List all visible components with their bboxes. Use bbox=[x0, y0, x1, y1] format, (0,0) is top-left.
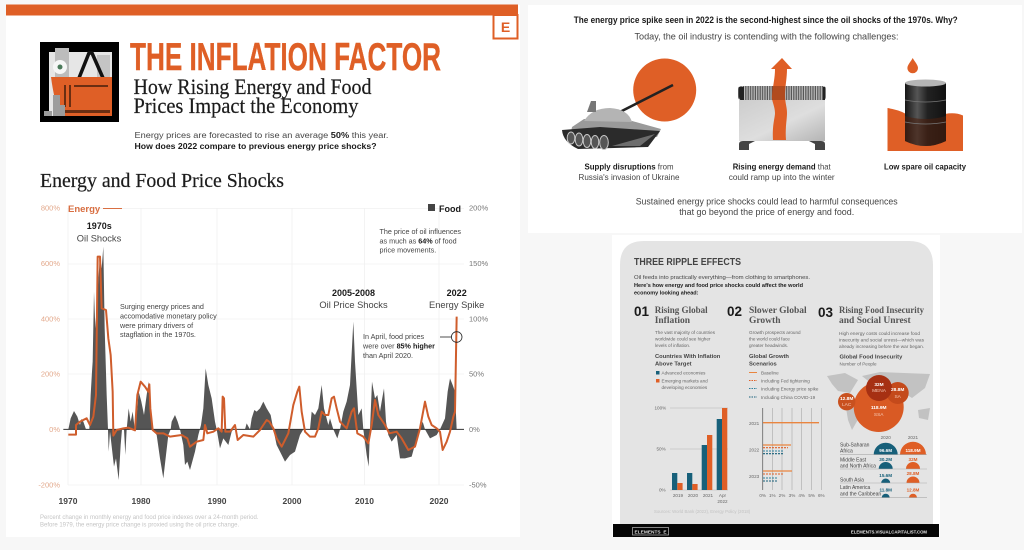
intro text: How does 2022 compare to previous energy price shocks? bbox=[134, 141, 376, 151]
annotation: stagflation: accomodative monetary policy bbox=[120, 312, 217, 320]
caption: rising energy demand: Rising energy demand that bbox=[733, 162, 831, 172]
left axis labels bbox=[38, 204, 60, 490]
icon: oil barrel and drop bbox=[888, 58, 963, 151]
table: food insecurity 2020 vs 2021: 2021 bbox=[908, 435, 919, 440]
table: food insecurity 2020 vs 2021: Sub-Saharan bbox=[840, 442, 870, 448]
section 01 text: worldwide could see higher bbox=[655, 336, 711, 342]
top accent bar bbox=[6, 4, 518, 16]
closing text: Sustained energy price shocks could lead to harmful consequences bbox=[636, 196, 898, 206]
intro: Oil feeds into practically everything—from clothing to smartphones. bbox=[634, 275, 811, 281]
right axis labels: 100% bbox=[469, 314, 489, 324]
logo: Elements E bbox=[494, 15, 518, 38]
right axis labels: 0% bbox=[469, 425, 480, 434]
source: Sources: World Bank (2022), Energy Policy (2018) bbox=[654, 509, 751, 514]
bubble map: food insecurity by region: 12.8M bbox=[840, 396, 853, 402]
section 03 heading bbox=[818, 305, 924, 326]
table: food insecurity 2020 vs 2021 bbox=[840, 435, 927, 498]
bubble map: food insecurity by region: SSA bbox=[874, 412, 884, 418]
right axis labels: 200% bbox=[469, 204, 489, 212]
section 01 text: The vast majority of countries bbox=[655, 330, 716, 335]
heading: The energy price spike seen in 2022 is the second-highest since the oil shocks of the 1970s. Why? bbox=[574, 15, 958, 25]
bar chart: global growth scenarios: 1% bbox=[769, 493, 776, 498]
bar chart: countries with inflation above target: 2020 bbox=[688, 493, 699, 498]
table: food insecurity 2020 vs 2021: and the Caribbean bbox=[840, 492, 881, 498]
table: food insecurity 2020 vs 2021: Latin America bbox=[840, 485, 871, 491]
right axis labels: 50% bbox=[469, 370, 484, 378]
closing text: that go beyond the price of energy and food. bbox=[679, 207, 854, 217]
table: food insecurity 2020 vs 2021: 118.9M bbox=[905, 448, 921, 453]
caption: supply disruptions bbox=[578, 162, 680, 182]
section 03 text: already increasing before the war began. bbox=[839, 344, 924, 349]
table: food insecurity 2020 vs 2021: 11.8M bbox=[879, 488, 892, 492]
left axis labels: 400% bbox=[41, 314, 60, 324]
legend: energy bbox=[68, 204, 122, 215]
section 02 legend: Including Energy price spike bbox=[761, 386, 819, 392]
section 02 heading bbox=[727, 304, 807, 326]
section 03 chart title: Global Food Insecurity bbox=[840, 354, 903, 360]
annotation: April food prices: were over 85% higher bbox=[362, 342, 435, 350]
section 02 text: Growth prospects around bbox=[749, 330, 801, 335]
section 02 legend bbox=[749, 370, 819, 400]
footer bar bbox=[613, 524, 939, 537]
left axis labels: -200% bbox=[38, 480, 60, 490]
left axis labels: 800% bbox=[41, 204, 60, 212]
section 01 text bbox=[655, 330, 716, 348]
annotation: stagflation: stagflation in the 1970s. bbox=[120, 330, 196, 339]
icon: heater and rising arrow bbox=[738, 58, 826, 150]
annotation: oil influence on food bbox=[380, 227, 461, 254]
section 01 legend: Emerging markets and bbox=[662, 378, 708, 384]
table: food insecurity 2020 vs 2021: 96.6M bbox=[879, 448, 892, 453]
x axis labels: 1980 bbox=[132, 496, 151, 506]
title: THE INFLATION FACTOR bbox=[130, 36, 441, 79]
section 02 chart title: Global Growth bbox=[749, 354, 789, 360]
table: food insecurity 2020 vs 2021: 15.6M bbox=[879, 473, 892, 478]
table: food insecurity 2020 vs 2021: Africa bbox=[840, 448, 853, 454]
table: food insecurity 2020 vs 2021: and North Africa bbox=[840, 464, 876, 470]
annotation: 2005-2008 oil price shocks: 2005-2008 bbox=[332, 288, 375, 298]
bar chart: global growth scenarios: 5% bbox=[808, 493, 815, 498]
annotation: 1970s oil shocks bbox=[77, 221, 122, 244]
bar chart: countries with inflation above target: 100% bbox=[654, 406, 666, 410]
table: food insecurity 2020 vs 2021: 12.8M bbox=[907, 488, 920, 492]
subtitle: How Rising Energy and Food bbox=[134, 74, 372, 99]
section 01 heading bbox=[634, 304, 708, 326]
section 01 legend: developing economies bbox=[662, 385, 708, 390]
table: food insecurity 2020 vs 2021: Middle East bbox=[840, 458, 867, 464]
section 01 legend bbox=[656, 370, 708, 390]
caption: supply disruptions: Russia's invasion of Ukraine bbox=[578, 172, 680, 182]
caption: rising energy demand: could ramp up into the winter bbox=[729, 172, 835, 182]
section 01 legend: Advanced economies bbox=[662, 370, 706, 376]
section 03 text: insecurity and social unrest—which was bbox=[839, 338, 925, 342]
caption: supply disruptions: Supply disruptions from bbox=[584, 162, 674, 172]
section 01 heading: 01 bbox=[634, 304, 650, 319]
x axis labels: 2000 bbox=[283, 496, 302, 506]
bar chart: global growth scenarios: 6% bbox=[818, 493, 825, 498]
bar chart: countries with inflation above target: 2022 bbox=[717, 499, 728, 504]
section 02 text: the world could face bbox=[749, 336, 790, 342]
intro: economy looking ahead: bbox=[634, 290, 699, 296]
chart heading: Energy and Food Price Shocks bbox=[40, 171, 284, 192]
footnote: Before 1979, the energy price change is proxied using the oil price change. bbox=[40, 522, 239, 528]
bar chart: countries with inflation above target: 2021 bbox=[703, 493, 714, 498]
section 01 text: levels of inflation. bbox=[655, 343, 690, 348]
table: food insecurity 2020 vs 2021: South Asia bbox=[840, 478, 864, 484]
right axis labels bbox=[469, 204, 489, 490]
bar chart: countries with inflation above target: 50% bbox=[656, 446, 666, 452]
bubble map: food insecurity by region: LAC bbox=[842, 402, 852, 408]
section 03 heading: 03 bbox=[818, 305, 834, 320]
section 02 heading: 02 bbox=[727, 304, 742, 319]
annotation: stagflation: were primary drivers of bbox=[119, 321, 193, 330]
bar chart: countries with inflation above target bbox=[654, 406, 728, 504]
x axis labels: 2010 bbox=[355, 496, 374, 506]
annotation: 1970s oil shocks: 1970s bbox=[87, 221, 112, 231]
table: food insecurity 2020 vs 2021: 32M bbox=[909, 457, 918, 462]
footnote bbox=[40, 515, 259, 528]
section 02 heading: Slower Global bbox=[749, 306, 807, 316]
section 03 text: High energy costs could increase food bbox=[839, 331, 920, 336]
subtitle bbox=[134, 74, 372, 118]
left axis labels: 0% bbox=[49, 425, 60, 434]
marker: April circle bbox=[440, 332, 462, 342]
section 01 heading: Rising Global bbox=[655, 306, 708, 316]
annotation: 2005-2008 oil price shocks: Oil Price Shocks bbox=[319, 300, 388, 310]
annotation: stagflation bbox=[119, 302, 217, 339]
section 02 chart title bbox=[749, 354, 789, 368]
subtitle: Prices Impact the Economy bbox=[134, 93, 358, 118]
bubble map: food insecurity by region: SA bbox=[894, 394, 902, 400]
legend: food: Food bbox=[439, 204, 461, 214]
bubble map: food insecurity by region bbox=[827, 372, 930, 432]
annotation: oil influence on food: price movements. bbox=[380, 246, 436, 254]
food series area bbox=[63, 247, 464, 480]
annotation: 2005-2008 oil price shocks bbox=[319, 288, 388, 310]
caption: rising energy demand bbox=[729, 162, 835, 182]
bar chart: global growth scenarios: 3% bbox=[789, 493, 795, 498]
icon: shopping basket collage bbox=[40, 42, 119, 122]
bar chart: global growth scenarios: 0% bbox=[759, 493, 766, 498]
legend: energy: Energy bbox=[68, 204, 101, 215]
legend: food bbox=[428, 204, 461, 214]
bar chart: global growth scenarios: 2022 bbox=[749, 448, 760, 452]
annotation: April food prices: than April 2020. bbox=[363, 351, 413, 360]
section 03 chart title bbox=[840, 354, 903, 366]
x axis labels: 1970 bbox=[59, 496, 78, 506]
panel: three ripple effects bbox=[612, 235, 940, 537]
section 03 heading: Rising Food Insecurity bbox=[839, 306, 924, 316]
section 01 chart title bbox=[655, 354, 721, 368]
section 02 chart title: Scenarios bbox=[749, 362, 777, 368]
footer bar: ELEMENTS.VISUALCAPITALIST.COM bbox=[851, 530, 927, 534]
left axis labels: 200% bbox=[41, 370, 60, 378]
section 03 text bbox=[839, 331, 925, 349]
table: food insecurity 2020 vs 2021: 2020 bbox=[881, 435, 891, 440]
right axis labels: -50% bbox=[469, 480, 487, 490]
bubble map: food insecurity by region: 118.9M bbox=[871, 405, 887, 411]
logo: Elements E: E bbox=[501, 19, 510, 35]
sub-heading: Today, the oil industry is contending with the following challenges: bbox=[634, 32, 898, 42]
section 02 text: greater headwinds. bbox=[749, 343, 788, 348]
annotation: stagflation: Surging energy prices and bbox=[120, 302, 204, 311]
caption: low spare capacity: Low spare oil capacity bbox=[884, 162, 966, 172]
right axis labels: 150% bbox=[469, 259, 489, 268]
bar chart: global growth scenarios bbox=[749, 408, 825, 498]
annotation: 1970s oil shocks: Oil Shocks bbox=[77, 234, 122, 244]
bubble map: food insecurity by region: MENA bbox=[872, 388, 887, 394]
heading: THREE RIPPLE EFFECTS bbox=[634, 256, 741, 268]
table: food insecurity 2020 vs 2021: 30.2M bbox=[879, 457, 892, 462]
annotation: April food prices: In April, food prices bbox=[363, 332, 425, 341]
annotation: 2022 energy spike bbox=[429, 288, 484, 310]
line and area chart: energy and food prices bbox=[38, 204, 489, 506]
annotation: April food prices bbox=[362, 332, 435, 360]
bar chart: global growth scenarios: 2023 bbox=[749, 474, 760, 479]
intro: Here's how energy and food price shocks could affect the world bbox=[634, 283, 803, 289]
bar chart: countries with inflation above target: 0% bbox=[659, 488, 666, 492]
bar chart: global growth scenarios: 2021 bbox=[749, 421, 760, 426]
footer bar: E bbox=[663, 530, 667, 536]
intro bbox=[634, 275, 811, 296]
icon: tank and orange circle bbox=[562, 58, 696, 150]
bar chart: countries with inflation above target: 2019 bbox=[673, 493, 684, 498]
closing text bbox=[636, 196, 898, 217]
energy series line bbox=[68, 257, 457, 450]
intro text: Energy prices are forecasted to rise an average 50% this year. bbox=[134, 130, 388, 140]
section 02 legend: Baseline bbox=[761, 370, 779, 376]
bar chart: global growth scenarios: 4% bbox=[798, 493, 805, 498]
bubble map: food insecurity by region: 32M bbox=[874, 382, 884, 388]
section 01 chart title: Above Target bbox=[655, 362, 692, 368]
bar chart: global growth scenarios: 2% bbox=[779, 493, 785, 498]
left axis labels: 600% bbox=[41, 259, 60, 268]
annotation: 2022 energy spike: 2022 bbox=[447, 288, 467, 298]
panel: oil industry challenges bbox=[528, 5, 1022, 233]
section 02 legend: Including China COVID-19 bbox=[761, 395, 816, 400]
section 02 text bbox=[749, 330, 801, 348]
bar chart: countries with inflation above target: Apr bbox=[719, 493, 727, 498]
section 02 legend: Including Fed tightening bbox=[761, 378, 810, 384]
section 01 chart title: Countries With Inflation bbox=[655, 354, 721, 360]
footer bar: ELEMENTS bbox=[634, 530, 661, 536]
annotation: oil influence on food: The price of oil influences bbox=[380, 227, 461, 236]
section 01 heading: Inflation bbox=[655, 316, 691, 326]
section 03 chart title: Number of People bbox=[840, 362, 877, 366]
x axis labels: 1990 bbox=[208, 496, 227, 506]
x axis labels bbox=[59, 496, 449, 506]
annotation: 2022 energy spike: Energy Spike bbox=[429, 300, 484, 310]
x axis labels: 2020 bbox=[430, 496, 449, 506]
intro text bbox=[134, 130, 388, 151]
section 03 heading: and Social Unrest bbox=[839, 316, 911, 326]
bubble map: food insecurity by region: 28.8M bbox=[891, 387, 904, 393]
annotation: oil influence on food: as much as 64% of food bbox=[380, 236, 457, 246]
table: food insecurity 2020 vs 2021: 28.8M bbox=[907, 471, 920, 476]
section 02 heading: Growth bbox=[749, 316, 781, 326]
footnote: Percent change in monthly energy and food price indexes over a 24-month period. bbox=[40, 515, 259, 521]
